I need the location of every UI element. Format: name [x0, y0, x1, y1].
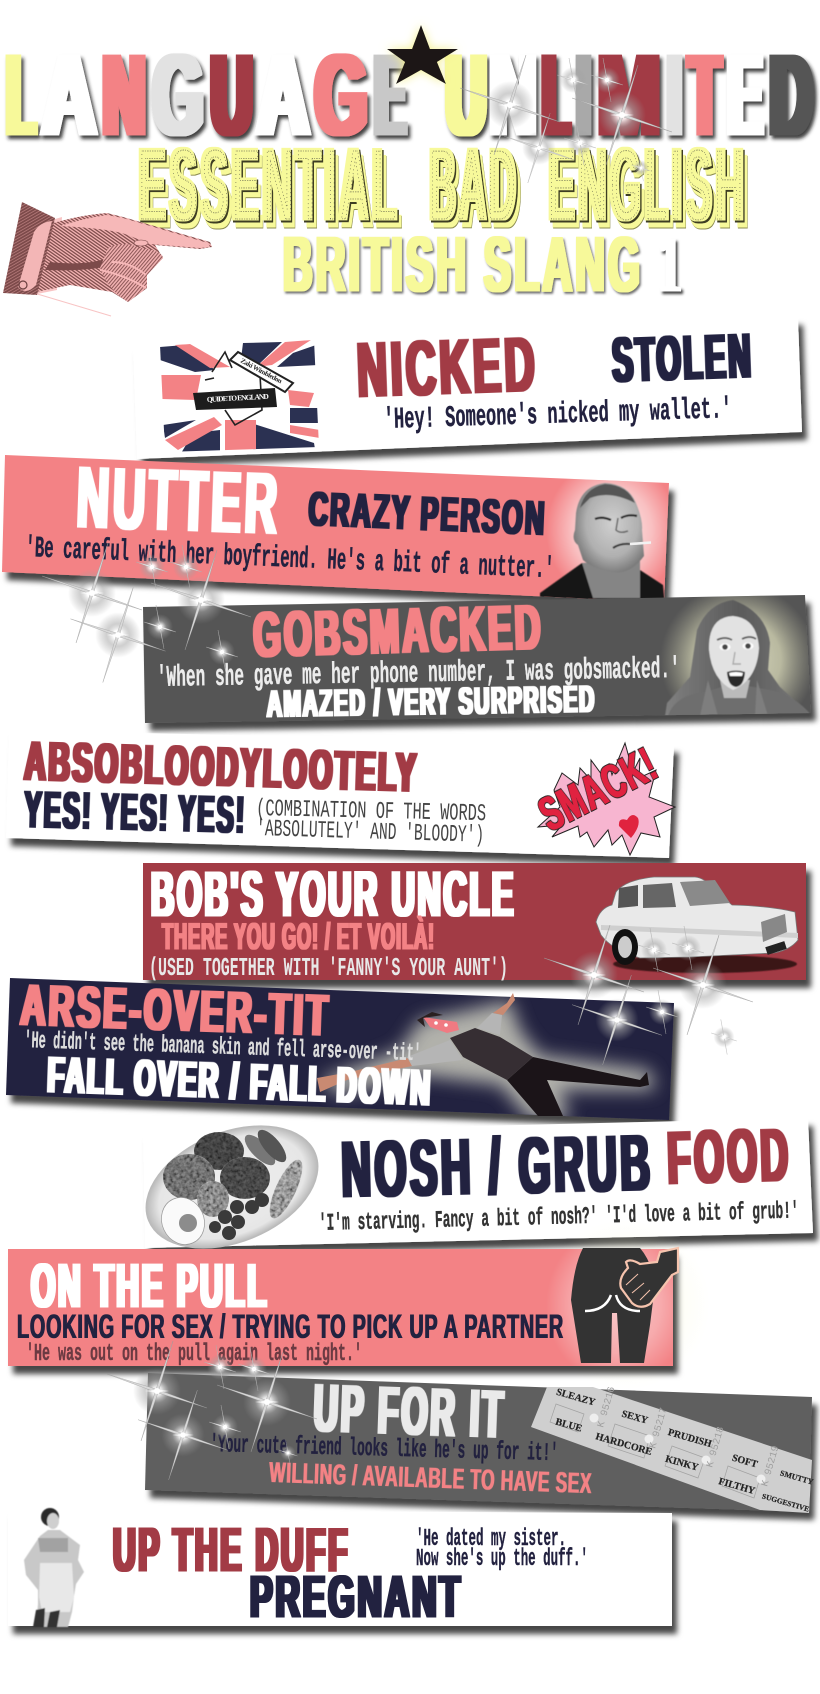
panel background	[8, 1249, 673, 1366]
subtitle: Essential Bad English: BAD	[429, 127, 519, 243]
example sentence	[416, 1526, 588, 1573]
title: Language Unlimited: I	[668, 30, 681, 160]
banner: on the pull	[8, 1236, 685, 1380]
image: union jack collage	[160, 340, 319, 452]
term: nicked: NICKED	[356, 320, 539, 414]
icon: smack comic burst: SMACK!	[531, 738, 666, 842]
image: ticket strip: K 95219	[760, 1445, 782, 1488]
glow	[540, 1220, 710, 1390]
image: man smoking	[539, 479, 668, 599]
image: ticket strip: BLUE	[554, 1417, 584, 1435]
example sentence: 'He was out on the pull again last night.'	[26, 1341, 362, 1368]
panel background	[8, 1510, 672, 1626]
term: nutter: NUTTER	[75, 449, 283, 553]
sparkles: up for it	[107, 1341, 317, 1480]
subtitle: Essential Bad English: ESSENTIAL	[138, 127, 400, 243]
image: ticket strip: SEXY	[620, 1409, 650, 1427]
title: Language Unlimited: E	[728, 30, 762, 160]
image: ticket strip: SMUTTY	[779, 1469, 815, 1487]
image: ticket strip: SOFT	[731, 1453, 759, 1471]
example sentence: 'He dated my sister.	[416, 1526, 566, 1553]
image: ticket strip: FILTHY	[717, 1476, 757, 1497]
meaning: WILLING / AVAILABLE TO HAVE SEX	[269, 1457, 593, 1500]
title: Language Unlimited: M	[598, 30, 660, 160]
title: Language Unlimited: N	[490, 30, 536, 160]
title: Language Unlimited: T	[689, 30, 720, 160]
image: ticket strip: KINKY	[664, 1454, 700, 1474]
title: Language Unlimited: G	[315, 30, 367, 160]
image: ticket strip: K 95218	[705, 1426, 727, 1469]
note: (COMBINATION OF THE WORDS	[256, 796, 486, 828]
subtitle: Essential Bad English: BAD	[430, 130, 518, 240]
banner: gobsmacked	[143, 584, 816, 736]
icon: smack comic burst	[531, 738, 675, 855]
term: ARSE-OVER-TIT	[20, 973, 332, 1049]
icon: star	[387, 25, 458, 84]
image: ticket strip: SLEAZY	[555, 1387, 597, 1409]
term: ON THE PULL	[31, 1252, 269, 1321]
image: three-wheeler car	[596, 877, 798, 973]
image: ticket strip: K 95217	[648, 1407, 670, 1450]
title: Language Unlimited: L	[543, 30, 569, 160]
icon: pointing hand	[3, 202, 212, 316]
example sentence: 'He didn't see the banana skin and fell arse-over -tit'	[24, 1028, 421, 1068]
banner: absobloodylootely	[6, 729, 675, 858]
title: Language Unlimited	[7, 30, 812, 160]
panel background	[2, 455, 669, 602]
term: ABSOBLOODYLOOTELY	[24, 729, 419, 804]
subtitle: British Slang 1: 1	[658, 221, 682, 308]
title: Language Unlimited: A	[42, 30, 96, 160]
image: surprised woman	[664, 596, 810, 716]
example sentence: Now she's up the duff.'	[416, 1546, 588, 1573]
title: Language Unlimited: U	[211, 30, 252, 160]
term: UP THE DUFF	[113, 1516, 350, 1585]
banner: up the duff	[8, 1508, 672, 1630]
panel background	[133, 317, 802, 459]
image: ticket strip: HARDCORE	[594, 1431, 654, 1458]
panel background	[145, 1373, 812, 1512]
sparkles: nutter and gobsmacked	[42, 543, 251, 682]
banner: bob's your uncle	[143, 858, 806, 983]
title: Language Unlimited: I	[577, 30, 590, 160]
subtitle: Essential Bad English: ESSENTIAL	[138, 130, 400, 240]
banner: arse-over-tit	[6, 973, 674, 1120]
sparkles: title	[460, 55, 672, 183]
note: (USED TOGETHER WITH 'FANNY'S YOUR AUNT')	[149, 953, 508, 983]
image: ticket strip: K 95216	[596, 1386, 618, 1429]
sparkles: bob's your uncle	[544, 925, 753, 1065]
banner: absobloodylootely: YES! YES! YES!	[24, 781, 247, 845]
title: Language Unlimited: U	[446, 30, 486, 160]
banner: nicked	[133, 317, 802, 460]
note: 'ABSOLUTELY' AND 'BLOODY')	[256, 816, 484, 850]
banner: nosh / grub	[128, 1102, 813, 1272]
meaning: FALL OVER / FALL DOWN	[47, 1046, 433, 1116]
banner: bob's your uncle: THERE YOU GO! / ET VOILÀ!	[162, 916, 435, 957]
panel background	[6, 730, 674, 858]
panel background	[6, 978, 674, 1120]
title: Language Unlimited: E	[375, 30, 405, 160]
meaning: PREGNANT	[250, 1564, 463, 1630]
title: Language Unlimited: L	[7, 30, 35, 160]
term: gobsmacked: GOBSMACKED	[252, 591, 544, 671]
image: man falling	[320, 1000, 655, 1120]
banner: nutter	[2, 449, 678, 606]
image: union jack collage: QUIDE TO ENGLAND	[207, 392, 270, 404]
panel background	[143, 1118, 813, 1248]
banner: up for it: UP FOR IT	[312, 1370, 507, 1453]
image: ticket strip: SUGGESTIVE	[761, 1492, 810, 1514]
image: ticket strip	[531, 1386, 815, 1514]
banner: up for it	[145, 1370, 815, 1514]
panel background	[143, 595, 811, 723]
image: ticket strip: PRUDISH	[667, 1427, 713, 1450]
image: woman in corset	[24, 1508, 84, 1627]
panel background	[143, 863, 806, 980]
meaning: crazy person: CRAZY PERSON	[308, 483, 548, 546]
title: Language Unlimited: A	[257, 30, 309, 160]
image: hand on bottom	[552, 1246, 680, 1366]
image: fried breakfast	[128, 1102, 336, 1272]
note	[256, 796, 486, 850]
title: Language Unlimited: N	[103, 30, 145, 160]
title: Language Unlimited: G	[153, 30, 203, 160]
image: union jack collage: Zaki Wimbledon	[239, 357, 284, 385]
